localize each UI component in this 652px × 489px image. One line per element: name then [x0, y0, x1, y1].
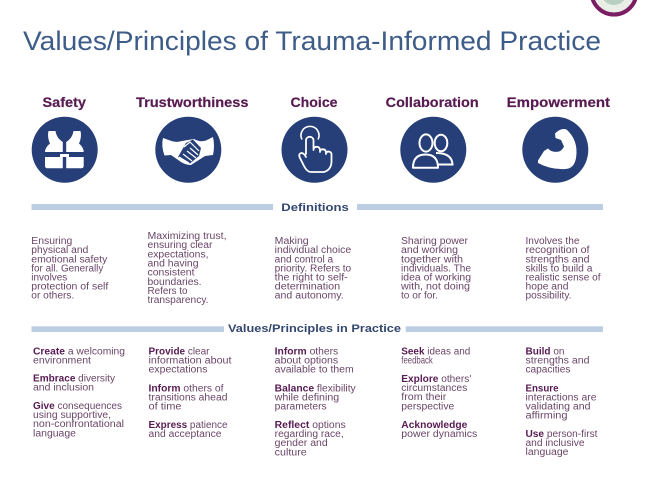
practice: Choice: Inform others	[275, 346, 338, 357]
definition: Trustworthiness: Refers to	[148, 286, 188, 297]
practice: Safety: language	[33, 428, 77, 439]
practice: Empowerment: Ensure	[526, 383, 559, 394]
practice: Safety	[33, 346, 125, 439]
practice: Collaboration: Explore others'	[401, 374, 471, 385]
definition: Empowerment: strengths and	[526, 254, 590, 265]
title: Values/Principles of Trauma-Informed Practice	[23, 26, 601, 56]
definition: Empowerment: skills to build a	[526, 263, 593, 274]
definition: Trustworthiness: and having	[148, 258, 198, 270]
definition: Choice	[275, 236, 352, 302]
definition: Choice: the right to self-	[275, 272, 348, 284]
practice: Choice: Balance flexibility	[275, 383, 356, 394]
practice: Empowerment	[526, 346, 598, 458]
icon: two people	[400, 117, 466, 183]
practice: Trustworthiness: of time	[148, 402, 182, 412]
practice: Trustworthiness: and acceptance	[148, 429, 222, 440]
heading: Empowerment: Empowerment	[507, 95, 611, 110]
practice: Collaboration: circumstances	[401, 383, 467, 394]
practice: Empowerment: validating and	[526, 402, 590, 412]
practice: Empowerment: language	[526, 447, 569, 458]
definition: Trustworthiness: transparency.	[148, 295, 208, 306]
practice: Choice: culture	[275, 447, 307, 458]
definition: Collaboration: idea of working	[401, 272, 471, 284]
definition: Choice: Making	[275, 236, 309, 247]
definition: Choice: determination	[275, 282, 340, 293]
definition: Trustworthiness: Maximizing trust,	[148, 231, 226, 242]
practice: Safety: Embrace diversity	[33, 373, 115, 384]
definition: Choice: individual choice	[275, 245, 352, 256]
practice: Choice: Reflect options	[275, 420, 346, 431]
practice: Trustworthiness: Inform others of	[148, 383, 224, 394]
definition: Collaboration: individuals. The	[401, 263, 472, 274]
practice: Trustworthiness	[148, 346, 232, 440]
definition: Safety: or others.	[31, 291, 74, 302]
definition: Trustworthiness: expectations,	[148, 249, 208, 260]
practice: Empowerment: affirming	[526, 411, 568, 422]
definition: Empowerment: realistic sense of	[526, 272, 601, 284]
practice: Trustworthiness: information about	[148, 355, 232, 366]
practice: Choice: regarding race,	[275, 429, 344, 440]
practice: Collaboration: Acknowledge	[401, 420, 468, 431]
logo seal	[592, 0, 636, 14]
definition: Empowerment	[526, 236, 601, 302]
icon: flexed arm	[522, 117, 588, 183]
definition: Collaboration: together with	[401, 254, 463, 265]
practice: Trustworthiness: Express patience	[148, 420, 228, 431]
practice: Empowerment: interactions are	[526, 392, 597, 403]
definition: Collaboration: and working	[401, 245, 458, 256]
definition: Safety: emotional safety	[31, 254, 107, 265]
practice: Safety: environment	[33, 355, 91, 366]
column headings	[42, 95, 611, 110]
practice: Choice: while defining	[274, 392, 339, 403]
definition: Empowerment: hope and	[526, 282, 568, 293]
icon: life vest	[32, 117, 98, 183]
practice: Safety: Create a welcoming	[33, 346, 125, 357]
icon: pointing hand	[282, 117, 348, 183]
heading: Trustworthiness: Trustworthiness	[136, 95, 248, 110]
definition: Collaboration	[400, 236, 472, 302]
definition: Empowerment: Involves the	[526, 236, 580, 247]
practice: Empowerment: capacities	[526, 364, 571, 376]
definition: Collaboration: Sharing power	[401, 236, 469, 247]
practice: Collaboration: feedback	[401, 355, 433, 366]
definition: Collaboration: to or for.	[401, 291, 438, 302]
practice: Choice: available to them	[275, 364, 354, 376]
practice: Collaboration	[401, 346, 477, 440]
section divider: Definitions	[32, 202, 603, 214]
heading: Collaboration: Collaboration	[386, 95, 479, 110]
definition: Trustworthiness: consistent	[148, 268, 195, 279]
definition: Choice: and control a	[275, 254, 334, 265]
definition: Safety: involves	[31, 272, 67, 284]
practice: Collaboration: Seek ideas and	[401, 346, 470, 357]
definition: Empowerment: possibility.	[526, 291, 572, 302]
definition: Choice: and autonomy.	[275, 291, 344, 302]
practice: Empowerment: Build on	[526, 346, 564, 357]
practice: Safety: Give consequences	[33, 401, 122, 412]
definition: Empowerment: recognition of	[526, 245, 590, 256]
practice: Choice: parameters	[275, 402, 327, 412]
practice: Trustworthiness: expectations	[148, 364, 208, 376]
practice: Collaboration: power dynamics	[401, 429, 477, 440]
practice: Empowerment: strengths and	[526, 355, 590, 366]
definition: Safety: protection of self	[31, 282, 109, 293]
practice: Trustworthiness: transitions ahead	[148, 392, 228, 403]
definition: Trustworthiness: ensuring clear	[148, 240, 213, 251]
icon: handshake	[155, 117, 221, 183]
definition: Safety	[31, 236, 109, 302]
practice: Collaboration: from their	[401, 392, 447, 403]
practice: Collaboration: perspective	[401, 401, 455, 412]
practice: Choice: gender and	[275, 438, 328, 449]
section divider: Definitions: Definitions	[281, 202, 349, 214]
practice: Empowerment: and inclusive	[526, 438, 585, 449]
practice: Trustworthiness: Provide clear	[148, 346, 210, 357]
definition: Safety: physical and	[31, 245, 88, 256]
definition: Safety: Ensuring	[31, 236, 72, 247]
heading: Safety: Safety	[42, 95, 87, 110]
definition: Trustworthiness	[148, 231, 226, 306]
definition: Choice: priority. Refers to	[275, 263, 352, 274]
practice: Choice	[274, 346, 356, 458]
definition: Safety: for all. Generally	[31, 263, 103, 274]
section divider: Values/Principles in Practice	[32, 323, 603, 335]
practice: Safety: using supportive,	[33, 410, 111, 421]
definition: Collaboration: with, not doing	[400, 282, 470, 293]
section divider: Values/Principles in Practice: Values/Principles in Practice	[228, 323, 401, 335]
heading: Choice: Choice	[290, 95, 338, 110]
practice: Safety: non-confrontational	[33, 419, 124, 430]
practice: Choice: about options	[275, 355, 338, 366]
definition: Trustworthiness: boundaries.	[148, 277, 202, 288]
practice: Safety: and inclusion	[33, 382, 94, 393]
practice: Empowerment: Use person-first	[526, 429, 598, 440]
